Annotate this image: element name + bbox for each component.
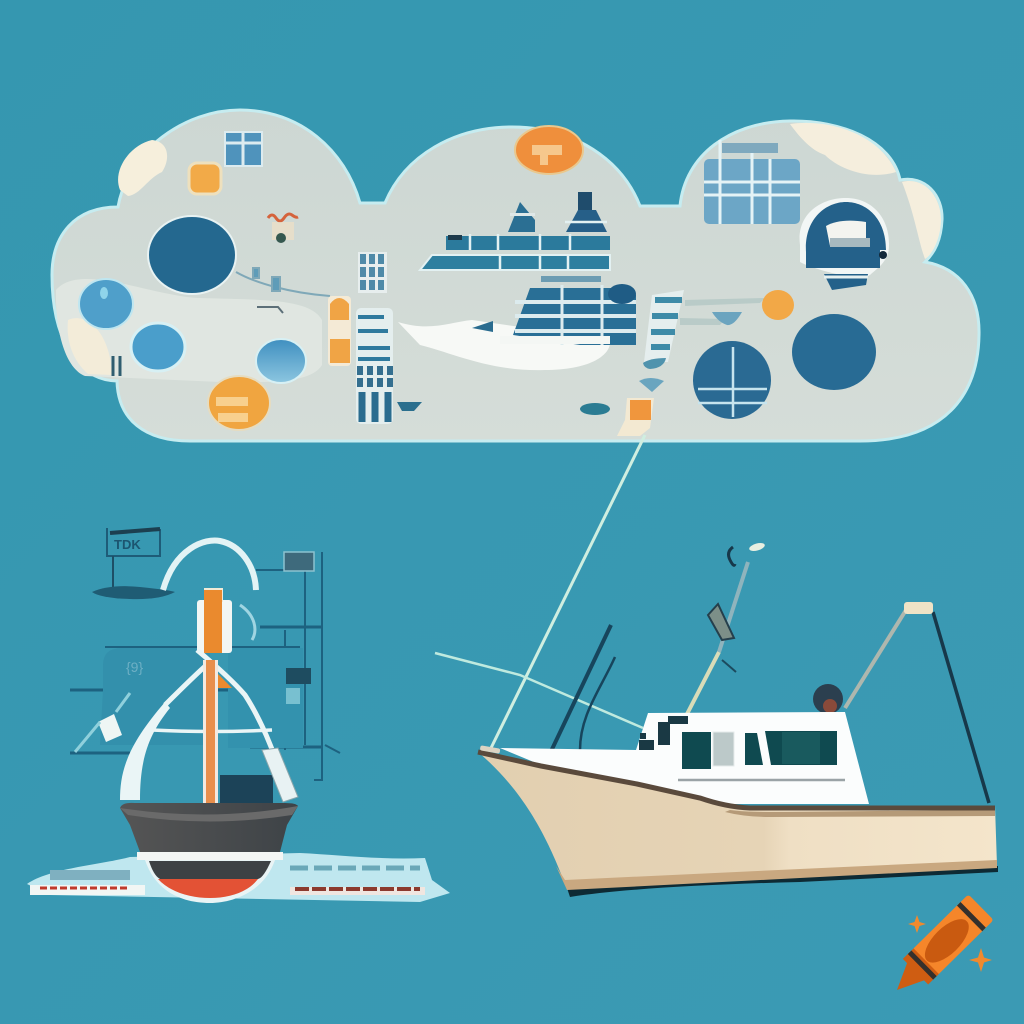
icon: dark circle left bbox=[148, 216, 236, 294]
icon: small dark wedge bbox=[397, 402, 422, 411]
panel: cloud bbox=[52, 110, 979, 441]
icon: orange circle lower left bbox=[208, 376, 270, 430]
icon: blue circle lower bbox=[131, 323, 185, 371]
logo: crayon bbox=[884, 894, 994, 1003]
icon: orange circle right bbox=[762, 290, 794, 320]
sparkle small bbox=[908, 915, 926, 933]
icon: dark head badge bbox=[800, 198, 889, 290]
window bbox=[745, 733, 763, 765]
flag sign: TDK bbox=[114, 537, 141, 552]
cabin rail bbox=[678, 779, 845, 781]
bow tip bbox=[480, 745, 500, 754]
icon: small dark post bbox=[113, 356, 120, 376]
panel: fishing boat bbox=[435, 542, 998, 897]
mast bbox=[686, 542, 766, 716]
dark box bbox=[284, 552, 314, 571]
tag bbox=[98, 714, 122, 742]
dark oval island bbox=[92, 586, 175, 599]
icon: blue circle with dot bbox=[79, 279, 133, 329]
antennas bbox=[545, 625, 615, 764]
shadow bbox=[566, 866, 998, 897]
cream patch: right bump bbox=[902, 181, 941, 259]
icon: orange square bbox=[189, 163, 221, 194]
icon: crossed circle bbox=[693, 341, 771, 419]
small indicator bbox=[286, 668, 311, 704]
orange wedge bbox=[212, 668, 232, 688]
second arc bbox=[240, 605, 255, 640]
panel: left schematic bbox=[27, 528, 450, 903]
icon: tapering stripes bbox=[644, 290, 684, 362]
left arch leg bbox=[120, 702, 170, 800]
icon: window top left bbox=[225, 132, 262, 166]
window large bbox=[765, 731, 837, 765]
rear gantry bbox=[845, 602, 989, 803]
icon: small bowls bbox=[639, 358, 666, 392]
white hatch bbox=[262, 748, 298, 802]
flag sign bbox=[107, 528, 160, 590]
window silver bbox=[713, 732, 734, 766]
schematic frame bbox=[70, 552, 340, 780]
icon: small window column bbox=[358, 252, 387, 293]
mast bbox=[203, 660, 218, 803]
sparkle large bbox=[969, 948, 992, 972]
icon: blue gradient circle bbox=[256, 339, 306, 383]
icon: large window grid bbox=[704, 140, 800, 224]
red keel bbox=[145, 860, 275, 903]
line from cloud to boat bbox=[491, 435, 645, 748]
foredeck and cabin bbox=[500, 712, 869, 804]
icon: bowl right bbox=[712, 312, 742, 325]
white wake bbox=[398, 320, 610, 370]
arch frame bbox=[152, 650, 285, 790]
dark box on deck bbox=[220, 775, 273, 803]
stripe column bbox=[356, 308, 393, 424]
right panel bbox=[228, 648, 303, 748]
hull lower stripe bbox=[556, 860, 997, 890]
panel label: {9} bbox=[126, 659, 143, 675]
icon: dark circle right bbox=[792, 314, 876, 390]
connector strip bbox=[236, 268, 330, 313]
icon: orange pill bbox=[328, 296, 351, 366]
icon: orange tag bbox=[617, 398, 654, 436]
gunwale bbox=[478, 752, 995, 808]
white deck band bbox=[137, 852, 283, 860]
icon: small flame marker bbox=[268, 214, 298, 243]
mast top bbox=[197, 588, 232, 653]
dark hull bbox=[120, 803, 298, 852]
white arc bbox=[163, 541, 256, 590]
cream patch: top left bbox=[118, 140, 167, 196]
hull bbox=[478, 752, 997, 888]
fishing rod bbox=[435, 653, 643, 728]
icon: upper ship bbox=[420, 192, 610, 270]
water strip bbox=[27, 853, 450, 902]
rounded panel bbox=[100, 648, 210, 745]
connector bands bbox=[680, 298, 765, 325]
icon: small triangle bbox=[472, 321, 493, 332]
icon: orange oval top bbox=[515, 126, 583, 174]
window bbox=[682, 732, 711, 769]
icon: dark oval bbox=[580, 403, 610, 415]
cream patch: top right bbox=[790, 123, 896, 175]
light lower-left area bbox=[56, 279, 322, 382]
tag strut bbox=[75, 693, 130, 752]
icon: lower ship bbox=[500, 276, 636, 345]
person bbox=[813, 684, 843, 718]
cabin details bbox=[639, 716, 688, 750]
gunwale band bbox=[725, 810, 995, 817]
cream patch: lower left bbox=[68, 318, 112, 375]
